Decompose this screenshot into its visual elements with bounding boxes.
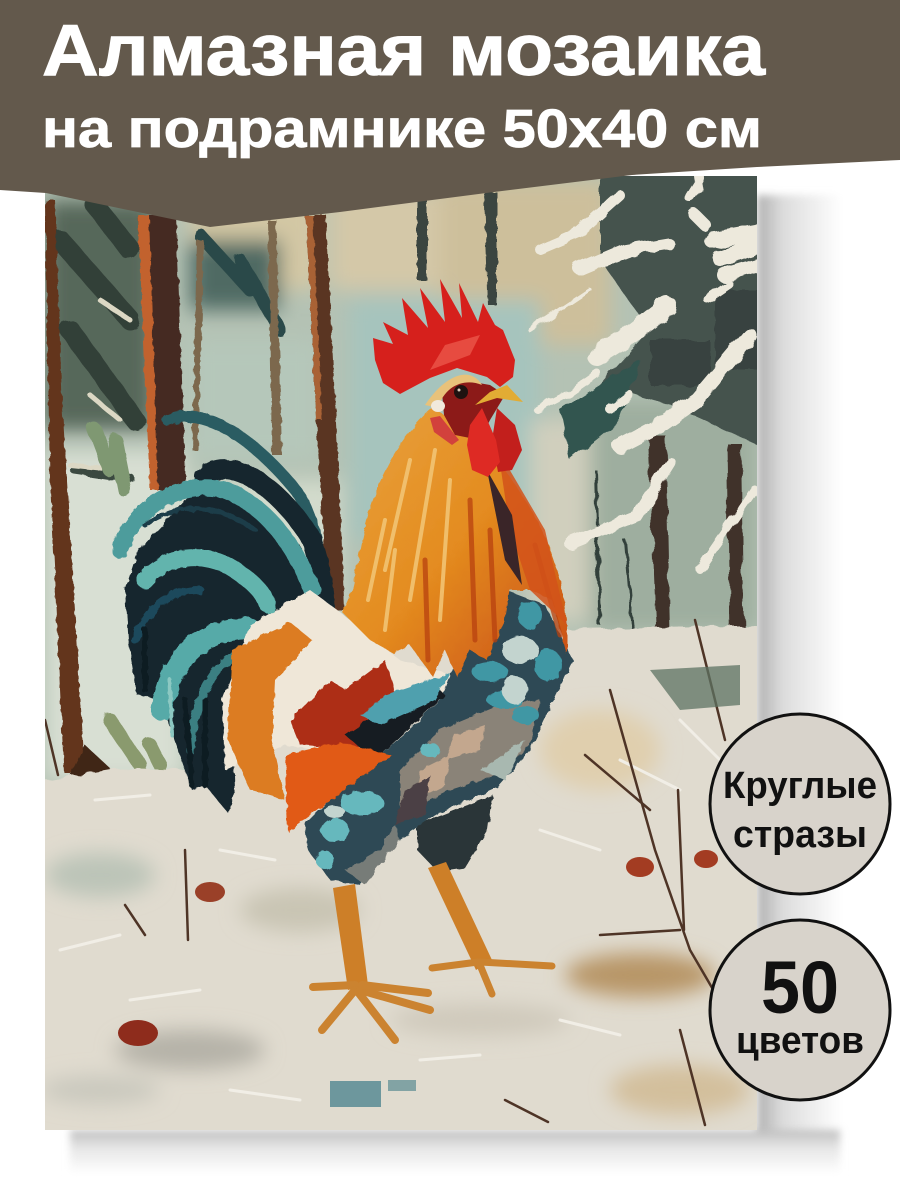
tail feathers — [120, 417, 330, 813]
header banner — [0, 0, 900, 227]
title: Алмазная мозаика — [42, 11, 766, 91]
right thigh and leg — [417, 795, 552, 994]
tree trunks — [45, 192, 497, 782]
small wattle — [430, 416, 459, 445]
bare twigs and red leaves — [45, 620, 740, 1125]
right wattle — [492, 408, 522, 472]
left foliage — [60, 205, 280, 765]
breast feathers — [316, 601, 562, 885]
badge: round rhinestones: стразы — [733, 814, 867, 856]
badge: round rhinestones — [710, 714, 890, 894]
head — [442, 382, 503, 438]
forest background — [45, 178, 757, 781]
comb highlight — [430, 335, 480, 370]
wing — [222, 590, 450, 832]
subtitle: на подрамнике 50х40 см — [42, 99, 762, 159]
left thigh and leg — [313, 884, 430, 1040]
badge: round rhinestones: Круглые — [723, 765, 877, 807]
beak — [475, 385, 523, 405]
canvas shadow — [70, 195, 842, 1174]
badge: 50 colours — [710, 920, 890, 1100]
neck hackles — [342, 408, 567, 677]
painting: rooster in a snowy forest — [45, 176, 757, 1130]
body — [305, 590, 573, 885]
centre wattle — [467, 408, 500, 477]
head crest feathers — [425, 375, 482, 408]
pine tree with snow — [530, 170, 770, 650]
orange wing tip — [285, 742, 392, 832]
badge: 50 colours: 50 — [761, 946, 839, 1029]
eye — [454, 385, 468, 399]
badge: 50 colours: цветов — [736, 1020, 864, 1062]
rooster — [120, 279, 573, 1040]
snowy ground — [45, 624, 757, 1130]
ear lobe — [431, 400, 445, 412]
comb — [373, 279, 515, 394]
